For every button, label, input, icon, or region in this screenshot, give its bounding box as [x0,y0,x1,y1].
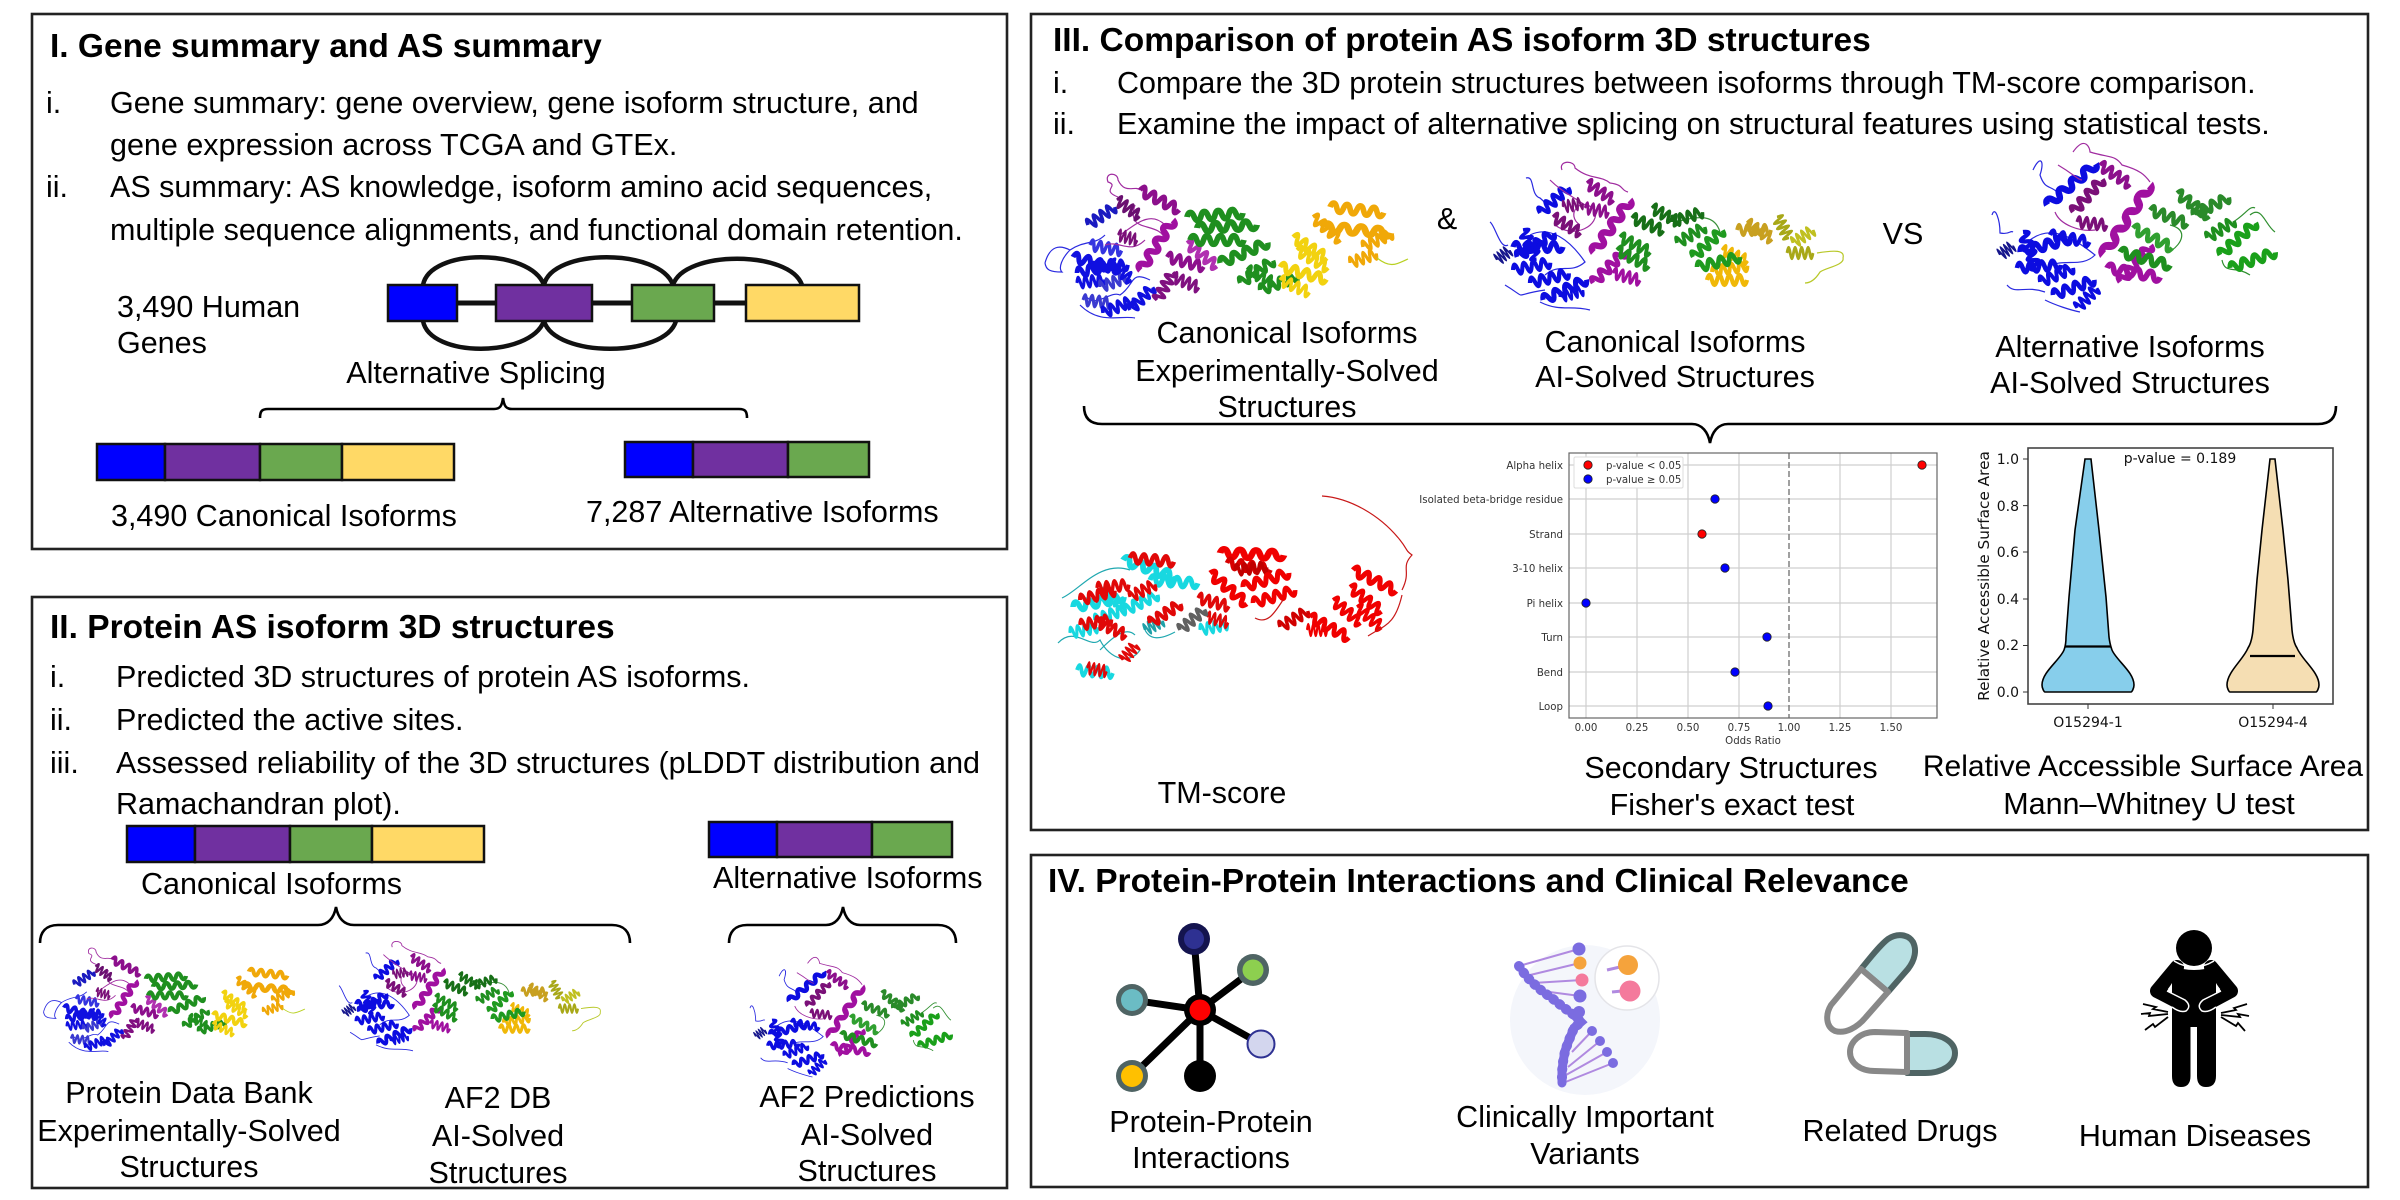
label relative accessible surface area [1923,750,2363,821]
canonical isoform bar [97,444,454,480]
forest plot: secondary structures: 0.00 [1575,723,1597,734]
legend: p-value < 0.05 [1606,461,1681,472]
heading II: II. Protein AS isoform 3D structures [50,609,615,646]
violin plot: relative accessible surface area: O15294-4 [2238,715,2308,731]
forest plot: secondary structures: Strand [1529,530,1563,541]
heading I: I. Gene summary and AS summary [50,28,602,65]
label human diseases: Human Diseases [2079,1119,2311,1153]
human genes label: 3,490 Human [117,290,300,324]
label secondary structures [1584,751,1878,822]
label AF2 predictions: AF2 Predictions [759,1080,975,1114]
summary list: i. [46,86,61,120]
violin plot: relative accessible surface area: p-value = 0.189 [2124,451,2236,467]
summary list: Gene summary: gene overview, gene isoform structure, and [110,86,919,120]
label protein-protein interactions: Interactions [1132,1141,1290,1175]
alternative isoform bar [709,822,952,857]
methods list: Ramachandran plot). [116,787,401,821]
label protein-protein interactions: Protein-Protein [1109,1105,1313,1139]
methods list: Assessed reliability of the 3D structures (pLDDT distribution and [116,746,980,780]
forest plot: secondary structures: 0.75 [1728,723,1750,734]
violin plot: relative accessible surface area: O15294-1 [2053,715,2123,731]
methods list: Predicted 3D structures of protein AS isoforms. [116,660,750,694]
label clinically important variants: Clinically Important [1456,1100,1714,1134]
label related drugs: Related Drugs [1803,1114,1997,1148]
label protein-protein interactions [1109,1105,1313,1175]
label alternative AI [1990,330,2270,400]
label AF2 DB: Structures [428,1156,568,1190]
label AF2 DB: AF2 DB [445,1081,551,1115]
label canonical AI: AI-Solved Structures [1535,360,1815,394]
forest plot: secondary structures [1419,453,1937,747]
canonical label: Canonical Isoforms [141,867,402,901]
human genes label [117,290,300,360]
forest plot: secondary structures: 0.25 [1626,723,1648,734]
alternative isoform bar [625,442,869,477]
icon: protein network [1116,923,1274,1092]
forest plot: secondary structures: Isolated beta-bridge residue [1419,495,1563,506]
label canonical AI [1535,325,1815,394]
panel: III. Comparison of protein AS isoform 3D structures [1031,14,2368,830]
brace canonical [40,907,630,943]
label PDB [37,1076,341,1184]
forest plot: secondary structures: Turn [1540,633,1563,644]
label AF2 predictions [759,1080,975,1188]
methods list: i. [50,660,65,694]
label canonical experimental [1135,316,1439,424]
protein structure: canonical AI [1490,162,1843,310]
heading IV: IV. Protein-Protein Interactions and Clinical Relevance [1048,863,1909,900]
TM-score superposition structure [1058,496,1412,678]
violin plot: relative accessible surface area: 1.0 [1997,452,2019,468]
brace alternative [729,907,956,943]
label PDB: Protein Data Bank [65,1076,314,1110]
label PDB: Experimentally-Solved [37,1114,341,1148]
comparison list: Compare the 3D protein structures between isoforms through TM-score comparison. [1117,66,2256,100]
gene exon diagram with splicing arcs [388,257,859,349]
label secondary structures: Secondary Structures [1584,751,1878,785]
forest plot: secondary structures: 1.50 [1880,723,1902,734]
label AF2 predictions: Structures [798,1154,936,1188]
legend: p-value ≥ 0.05 [1606,475,1681,486]
forest plot: secondary structures: Odds Ratio [1725,736,1781,747]
protein structure: alternative AI [1992,143,2277,312]
heading III: III. Comparison of protein AS isoform 3D structures [1053,22,1871,59]
brace [260,398,747,418]
label PDB: Structures [120,1150,258,1184]
icon: human disease figure [2141,930,2249,1087]
forest plot: secondary structures: Bend [1537,668,1563,679]
legend [1574,457,1683,488]
label relative accessible surface area: Relative Accessible Surface Area [1923,750,2363,783]
summary list: multiple sequence alignments, and functional domain retention. [110,213,963,247]
label alternative AI: Alternative Isoforms [1995,330,2265,364]
ampersand: & [1437,202,1457,236]
label AF2 predictions: AI-Solved [801,1118,933,1152]
violin O15294-1 [2042,459,2134,692]
protein structure: canonical experimental [1045,174,1408,318]
violin plot: relative accessible surface area: 0.0 [1997,685,2019,701]
label canonical experimental: Canonical Isoforms [1156,316,1418,350]
forest plot: secondary structures: 3-10 helix [1512,564,1563,575]
label AF2 DB: AI-Solved [432,1119,564,1153]
summary list: ii. [46,170,68,204]
violin plot: relative accessible surface area: Relative Accessible Surface Area [1975,451,1993,701]
comparison list: ii. [1053,107,1075,141]
summary list [46,86,963,247]
violin plot: relative accessible surface area: 0.2 [1997,638,2019,654]
alternative count: 7,287 Alternative Isoforms [586,495,939,529]
comparison list: Examine the impact of alternative splicing on structural features using statistical tests. [1117,107,2270,141]
label clinically important variants [1456,1100,1714,1171]
VS label: VS [1883,217,1923,251]
icon: DNA variants [1510,942,1660,1095]
summary list: AS summary: AS knowledge, isoform amino acid sequences, [110,170,932,204]
label canonical experimental: Structures [1218,390,1356,424]
panel: II. Protein AS isoform 3D structures [32,597,1007,1190]
label alternative AI: AI-Solved Structures [1990,366,2270,400]
methods list: Predicted the active sites. [116,703,464,737]
protein structure: AF2 DB [339,941,600,1051]
protein structure: PDB [44,948,305,1052]
canonical count: 3,490 Canonical Isoforms [111,499,457,533]
forest plot: secondary structures: 0.50 [1677,723,1699,734]
forest plot: secondary structures: 1.00 [1778,723,1800,734]
label TM-score: TM-score [1158,776,1286,810]
canonical isoform bar [127,826,484,862]
label canonical experimental: Experimentally-Solved [1135,354,1439,388]
violin plot: relative accessible surface area: 0.6 [1997,545,2019,561]
label canonical AI: Canonical Isoforms [1544,325,1806,359]
forest plot: secondary structures: Alpha helix [1506,461,1563,472]
forest plot: secondary structures: Pi helix [1527,599,1563,610]
methods list [50,660,980,821]
alternative splicing label: Alternative Splicing [346,356,606,390]
panel: IV. Protein-Protein Interactions and Clinical Relevance [1031,855,2368,1187]
human genes label: Genes [117,326,207,360]
violin plot: relative accessible surface area: 0.4 [1997,592,2019,608]
methods list: ii. [50,703,72,737]
methods list: iii. [50,746,79,780]
panel: I. Gene summary and AS summary [32,14,1007,549]
comparison list [1053,66,2270,141]
violin plot: relative accessible surface area [1975,448,2333,731]
violin plot: relative accessible surface area: 0.8 [1997,499,2019,515]
forest plot: secondary structures: 1.25 [1829,723,1851,734]
label relative accessible surface area: Mann–Whitney U test [2003,787,2295,821]
brace [1084,406,2336,443]
forest plot: secondary structures: Loop [1539,702,1563,713]
label AF2 DB [428,1081,568,1190]
summary list: gene expression across TCGA and GTEx. [110,128,677,162]
label clinically important variants: Variants [1530,1137,1640,1171]
icon: drugs [1827,935,1955,1073]
comparison list: i. [1053,66,1068,100]
label secondary structures: Fisher's exact test [1610,788,1855,822]
protein structure: AF2 predictions [750,957,952,1077]
alternative label: Alternative Isoforms [713,861,983,895]
violin O15294-4 [2227,459,2319,692]
